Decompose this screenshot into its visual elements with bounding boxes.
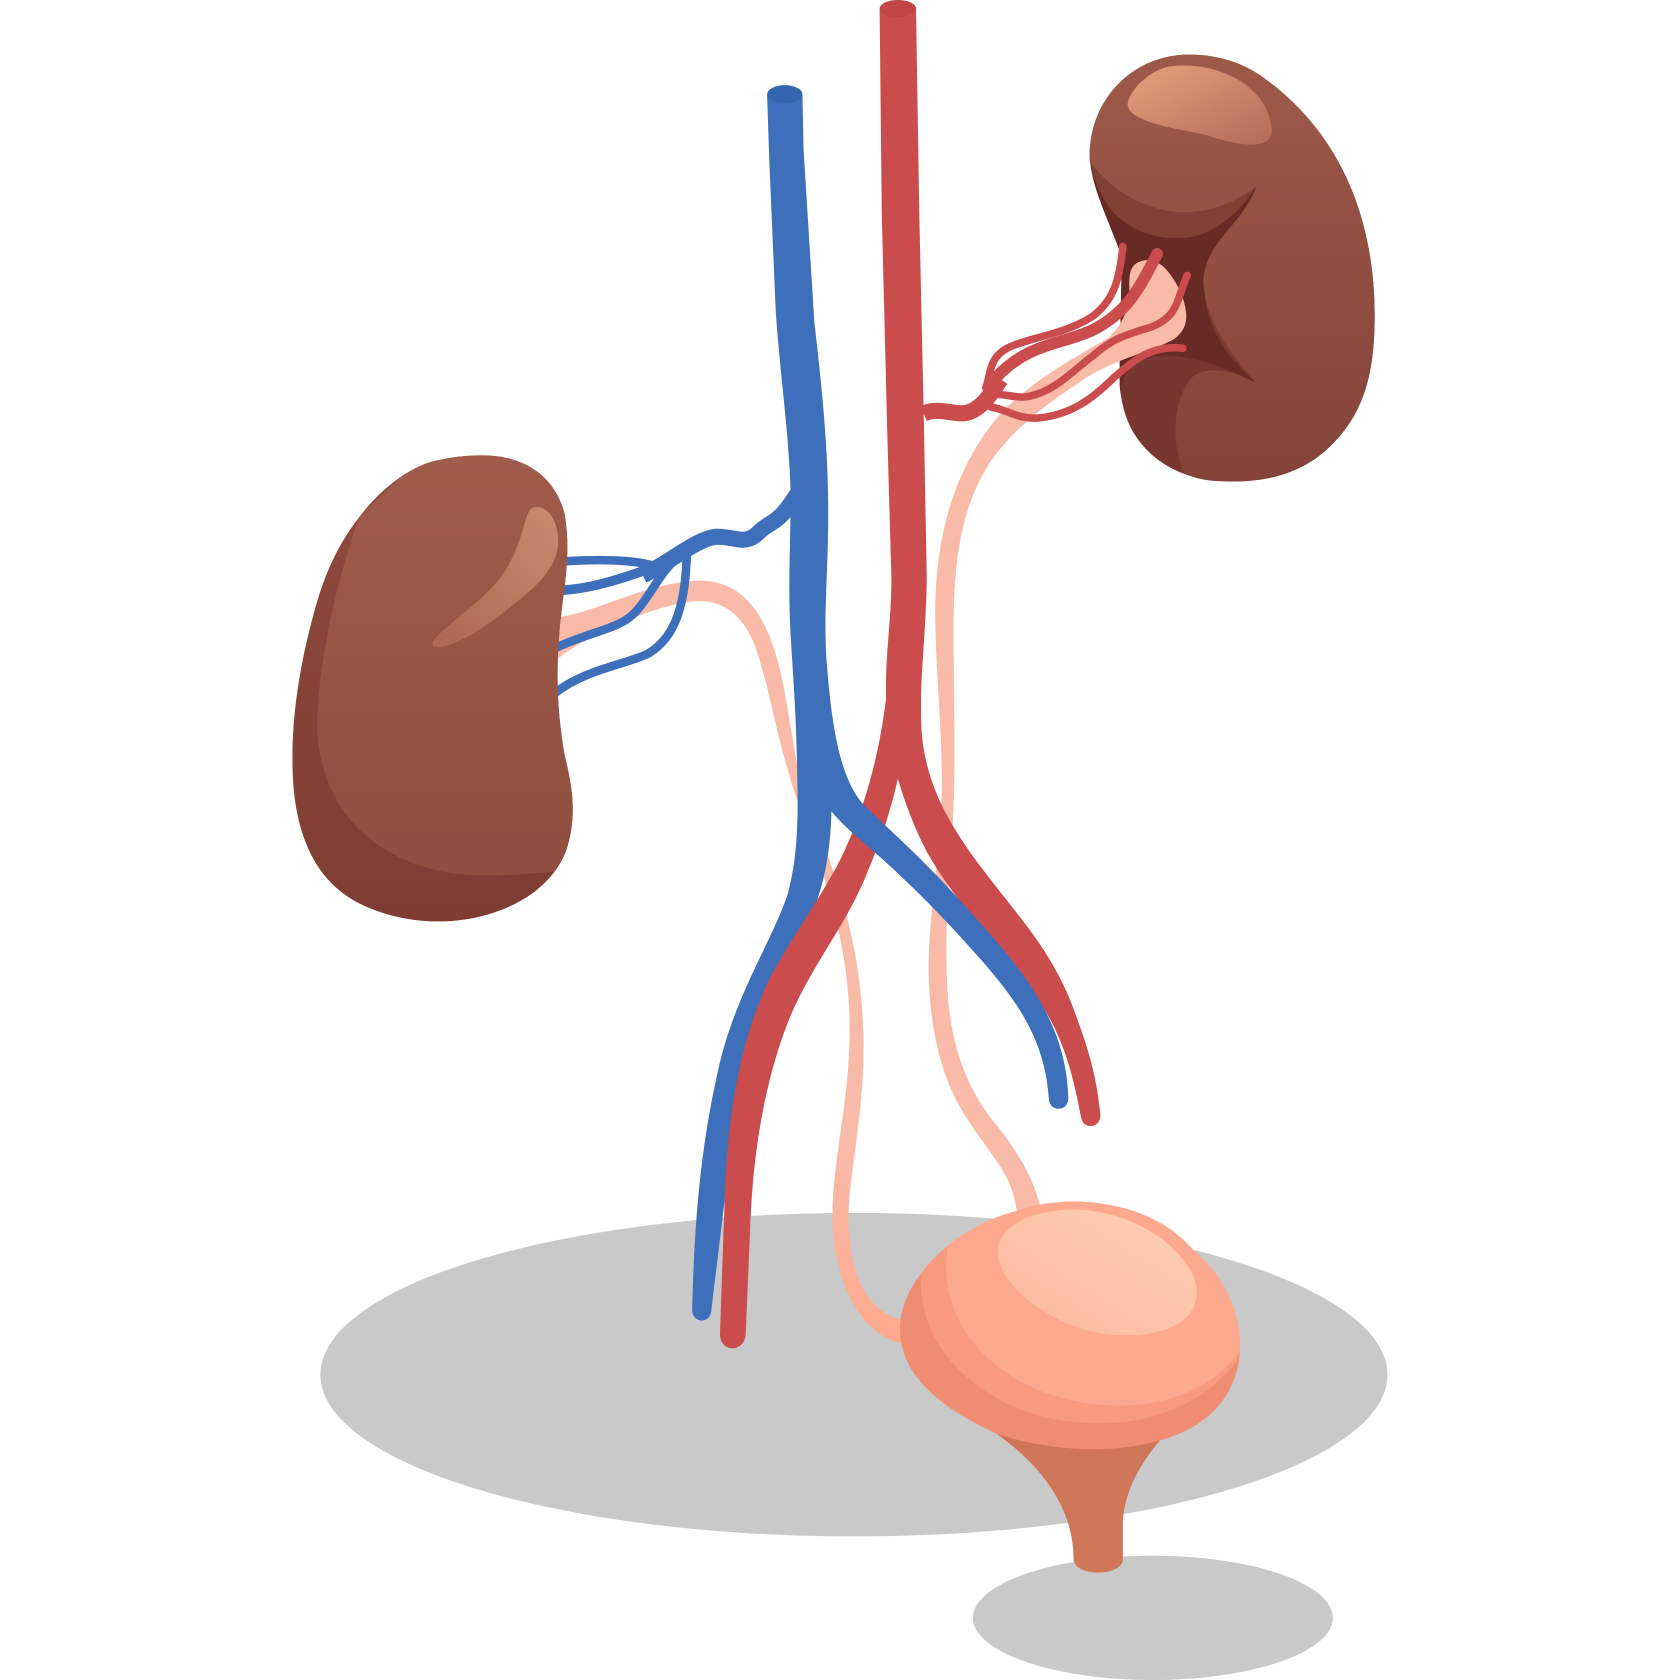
bladder mid tone	[921, 1202, 1240, 1424]
upper lobe shade	[1090, 64, 1286, 238]
inferior vena cava	[692, 85, 1068, 1321]
kidney hilum base	[1090, 55, 1375, 481]
vena cava right branch over aorta	[831, 766, 1068, 1109]
bladder	[900, 1202, 1240, 1450]
bladder highlight	[998, 1210, 1197, 1335]
left ureter	[557, 581, 902, 1344]
small floor shadow	[973, 1556, 1333, 1680]
vena cava top opening	[767, 85, 802, 103]
lower lobe shade	[1121, 356, 1286, 481]
bladder outer body	[900, 1202, 1240, 1449]
kidney highlight	[433, 507, 558, 647]
right renal arteries	[924, 246, 1187, 418]
aorta	[720, 0, 1100, 1348]
large floor shadow	[320, 1213, 1387, 1536]
left kidney	[292, 450, 600, 921]
kidney, vessels and bladder illustration	[292, 0, 1388, 1680]
kidney main surface	[317, 456, 573, 876]
kidney highlight	[1128, 65, 1272, 145]
kidney main surface	[1090, 55, 1375, 481]
bladder neck	[996, 1434, 1160, 1573]
renal pelvis	[1071, 260, 1186, 380]
left renal veins	[555, 491, 799, 693]
right ureter	[929, 338, 1114, 1212]
bladder main tone	[946, 1202, 1240, 1406]
right kidney	[1090, 55, 1375, 481]
aorta top opening	[880, 0, 916, 17]
kidney base shade	[292, 455, 573, 921]
inner hilum edge shade	[1204, 182, 1286, 384]
